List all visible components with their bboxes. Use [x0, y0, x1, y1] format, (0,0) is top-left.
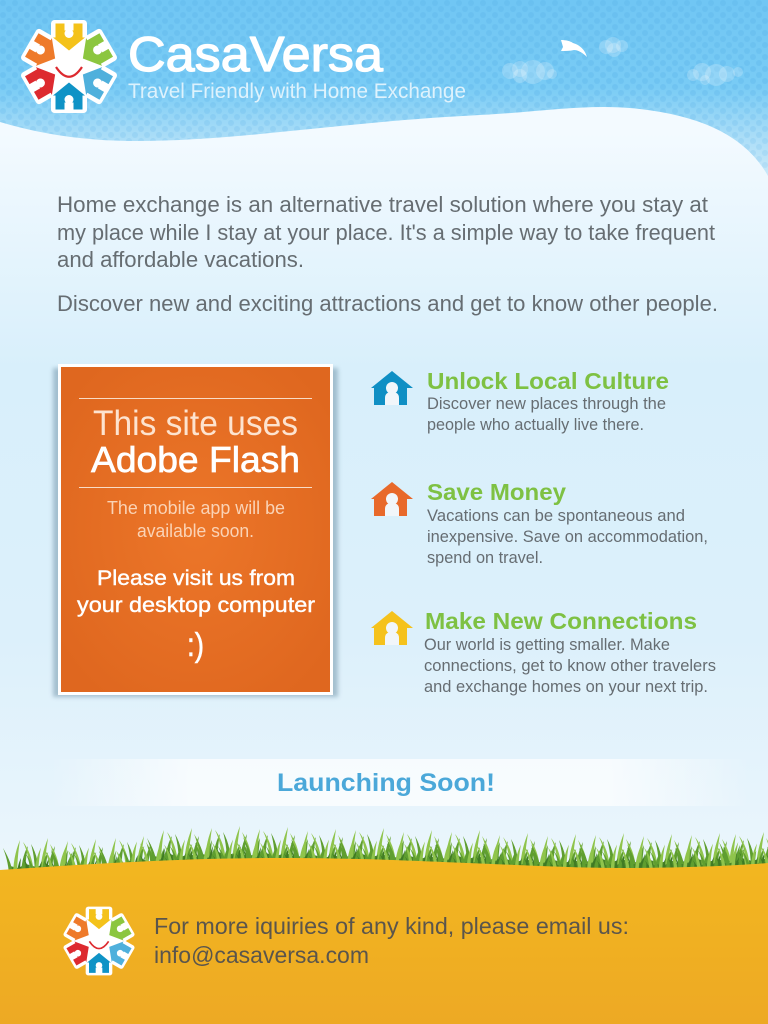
feature: Save Money: spend on travel. [427, 548, 543, 567]
panel: Adobe Flash notice: your desktop computer [77, 594, 315, 617]
intro text: and affordable vacations. [57, 247, 304, 272]
bird [561, 40, 587, 57]
icon: yellow house [371, 611, 413, 645]
footer contact text: For more iquiries of any kind, please email us: [154, 913, 629, 939]
feature: Make New Connections: and exchange homes on your next trip. [424, 677, 708, 696]
panel: Adobe Flash notice: :) [187, 626, 204, 663]
tagline: Travel Friendly with Home Exchange [128, 80, 466, 103]
feature: Unlock Local Culture [371, 368, 669, 434]
panel: Adobe Flash notice: The mobile app will be [107, 498, 285, 518]
feature: Make New Connections: Our world is getting smaller. Make [424, 635, 670, 654]
panel: Adobe Flash notice: Please visit us from [97, 567, 295, 590]
intro text: my place while I stay at your place. It's a simple way to take frequent [57, 220, 716, 245]
panel: Adobe Flash notice: available soon. [137, 521, 254, 541]
launching soon banner: Launching Soon! [277, 769, 495, 797]
cloud middle [599, 37, 628, 57]
feature: Save Money: Save Money [427, 479, 566, 505]
brand name: CasaVersa [128, 28, 384, 82]
intro text: Discover new and exciting attractions and get to know other people. [57, 291, 718, 316]
grass [3, 826, 768, 879]
panel: Adobe Flash notice: This site uses [93, 404, 298, 443]
footer contact text: info@casaversa.com [154, 942, 369, 968]
footer contact text [154, 913, 629, 968]
launching soon banner [50, 759, 750, 806]
feature: Save Money [371, 479, 708, 567]
feature: Unlock Local Culture: Discover new places through the [427, 394, 666, 413]
panel: Adobe Flash notice: Adobe Flash [91, 439, 300, 480]
feature: Make New Connections: connections, get to know other travelers [424, 656, 716, 675]
feature: Make New Connections: Make New Connections [425, 608, 697, 634]
cloud left [502, 60, 557, 84]
icon: blue house [371, 371, 413, 405]
cloud right [687, 63, 743, 86]
logo: CasaVersa mark [20, 20, 118, 113]
feature: Save Money: Vacations can be spontaneous and [427, 506, 685, 525]
feature: Unlock Local Culture: Unlock Local Culture [427, 368, 669, 394]
intro text [57, 192, 718, 316]
feature: Make New Connections [371, 608, 716, 696]
feature: Unlock Local Culture: people who actually live there. [427, 415, 644, 434]
header sky [0, 0, 768, 190]
feature: Save Money: inexpensive. Save on accommodation, [427, 527, 708, 546]
panel: Adobe Flash notice [53, 364, 338, 697]
intro text: Home exchange is an alternative travel solution where you stay at [57, 192, 709, 217]
footer logo [63, 907, 135, 975]
icon: orange house [371, 482, 413, 516]
footer ground [0, 858, 768, 1024]
